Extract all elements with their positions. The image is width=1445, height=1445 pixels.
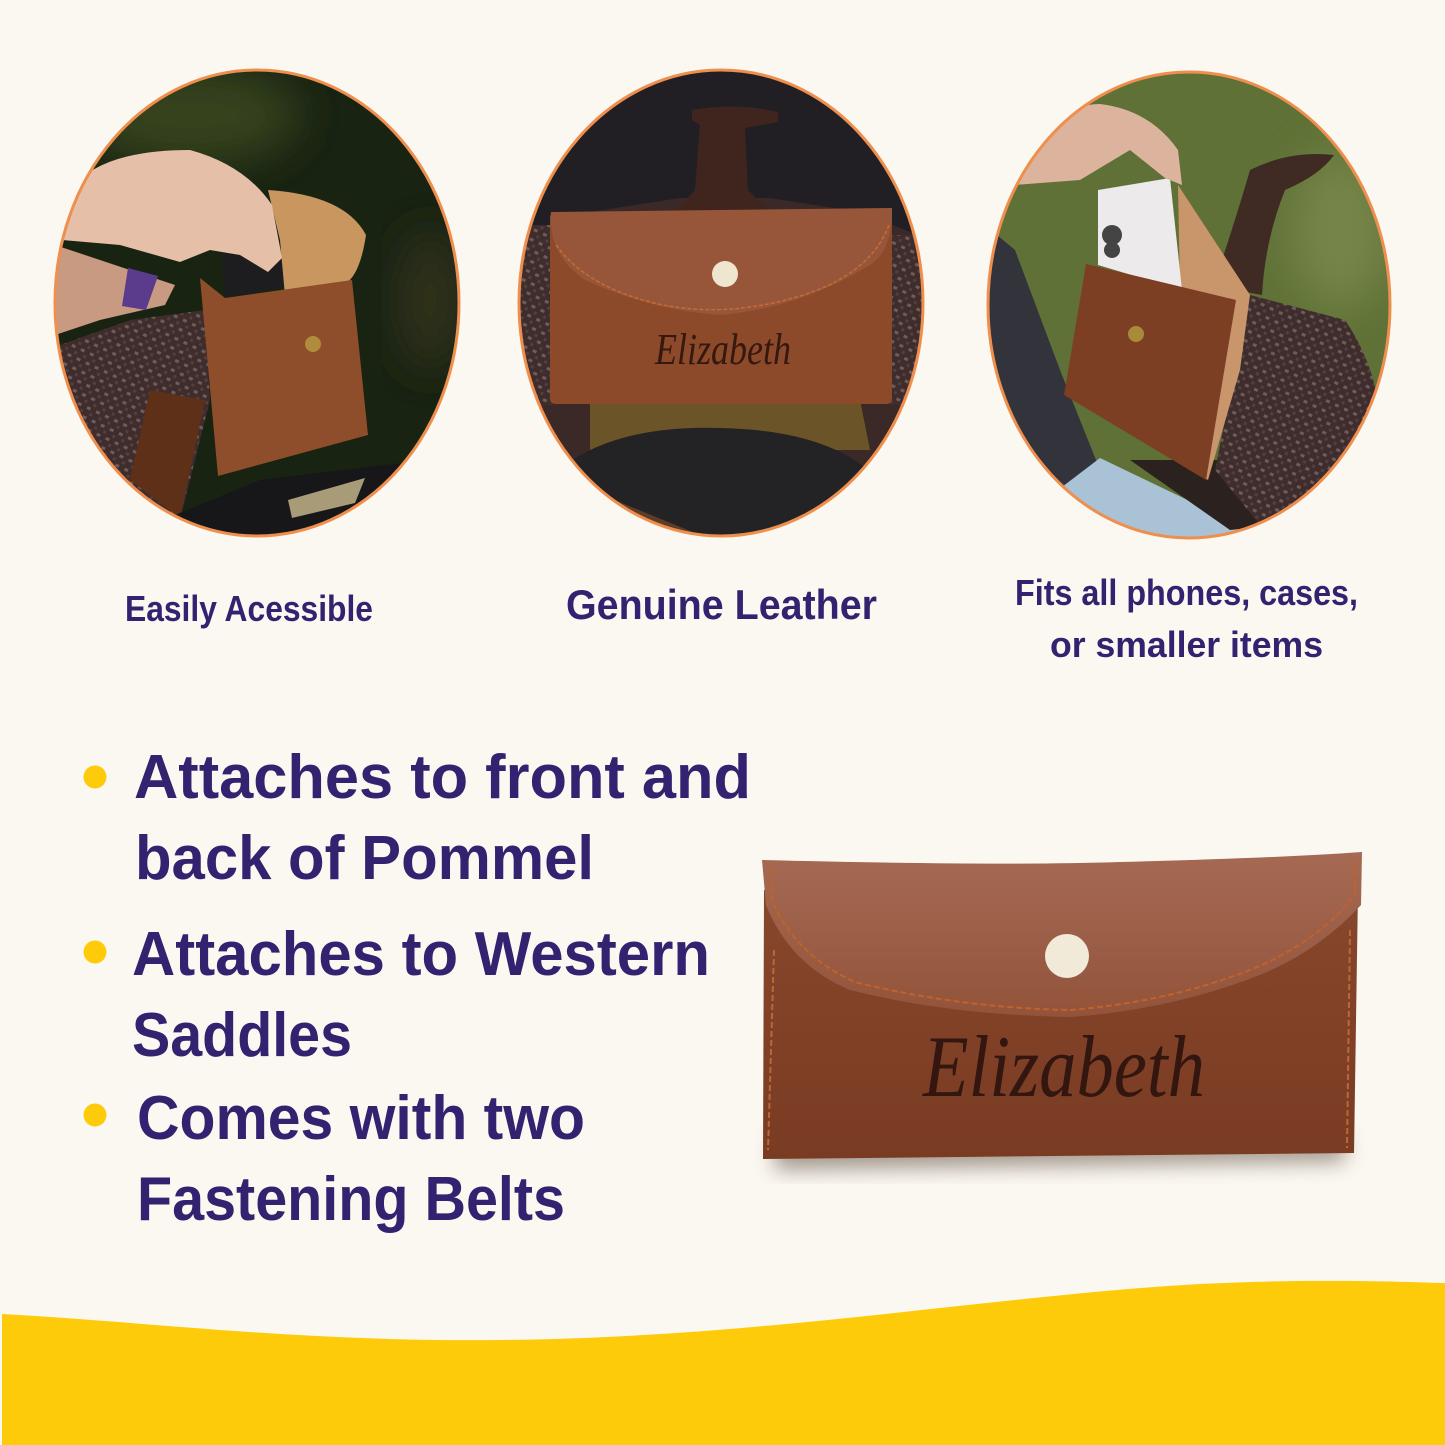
bullet 1: Attaches to front and <box>134 743 751 812</box>
bullet 2: Saddles <box>132 1001 352 1070</box>
bullet 3 <box>84 1084 585 1234</box>
caption: fits all phones <box>1015 572 1358 665</box>
engraved name: Elizabeth: Elizabeth <box>654 325 791 374</box>
photo: genuine leather <box>515 65 930 540</box>
yellow wave footer <box>2 1281 1445 1445</box>
caption: fits all phones: or smaller items <box>1050 624 1323 665</box>
product photo: leather pouch <box>762 852 1362 1170</box>
bullet 3: Comes with two <box>137 1084 585 1153</box>
bullet 2: Attaches to Western <box>132 920 710 989</box>
caption: easily accessible: Easily Acessible <box>125 588 373 629</box>
photo: fits all phones <box>985 70 1395 545</box>
bullet 2 <box>84 920 710 1070</box>
engraved name: Elizabeth: Elizabeth <box>921 1019 1205 1116</box>
bullet list <box>84 743 751 1234</box>
bullet 1 <box>84 743 751 893</box>
photo: easily accessible <box>50 65 465 540</box>
caption: genuine leather: Genuine Leather <box>566 581 877 628</box>
bullet 3: Fastening Belts <box>137 1165 565 1234</box>
bullet 1: back of Pommel <box>135 824 594 893</box>
caption: fits all phones: Fits all phones, cases, <box>1015 572 1358 613</box>
